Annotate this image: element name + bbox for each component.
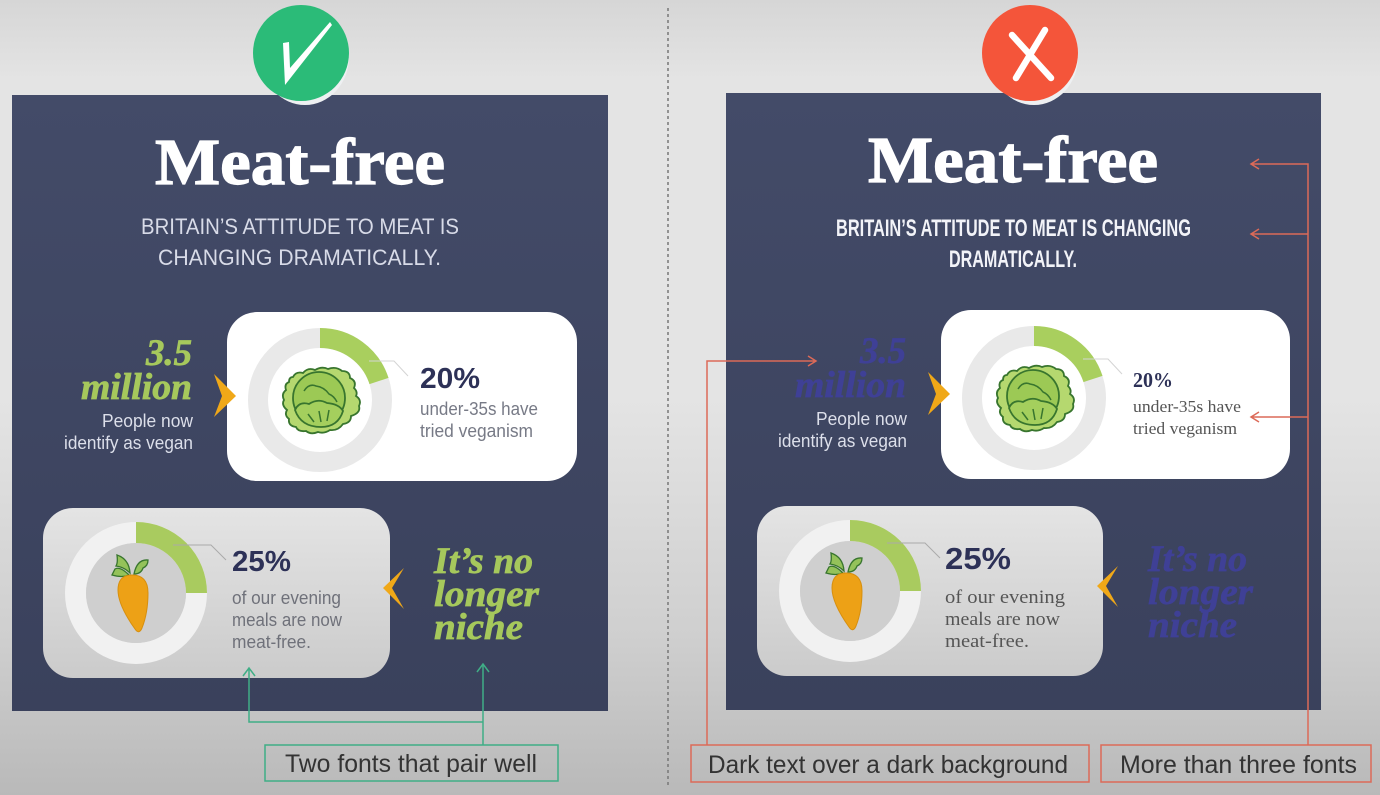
- subtitle: DRAMATICALLY.: [949, 246, 1077, 273]
- dotted centre divider: [667, 8, 669, 786]
- quote: it's no longer niche: longer: [434, 574, 540, 615]
- quote: it's no longer niche: longer: [1148, 572, 1254, 613]
- callout: more than three fonts: More than three fonts: [1120, 751, 1357, 779]
- subtitle: [141, 214, 459, 270]
- icon: green check mark: [253, 5, 349, 105]
- quote: it's no longer niche: [1147, 539, 1254, 646]
- chevron arrow right: [214, 374, 236, 417]
- callout: two fonts: Two fonts that pair well: [285, 750, 537, 778]
- card: 25 percent: meat-free.: [232, 632, 311, 652]
- stat: 3.5 million vegans: 3.5: [859, 331, 906, 372]
- card: 25 percent: meals are now: [232, 610, 343, 630]
- card: 20 percent: [227, 312, 577, 481]
- annotation arrows: good fonts: [243, 664, 489, 745]
- donut chart 20 percent: [972, 336, 1122, 460]
- card: 25 percent: meals are now: [945, 609, 1060, 630]
- stat: 3.5 million vegans: identify as vegan: [64, 433, 193, 453]
- stat: 3.5 million vegans: identify as vegan: [778, 431, 907, 451]
- card: 25 percent: of our evening: [232, 588, 341, 608]
- stat: 3.5 million vegans: 3.5: [145, 333, 192, 374]
- card: 25 percent: of our evening: [945, 587, 1066, 608]
- stat: 3.5 million vegans: People now: [816, 409, 908, 429]
- quote: it's no longer niche: It’s no: [1147, 539, 1247, 580]
- title: Meat-free: [155, 126, 445, 199]
- donut chart 25 percent: [76, 532, 226, 654]
- callout: two fonts: [265, 745, 558, 781]
- title: Meat-free: [868, 124, 1158, 197]
- subtitle: CHANGING DRAMATICALLY.: [158, 245, 441, 270]
- stat: 3.5 million vegans: [778, 331, 908, 451]
- subtitle: [836, 215, 1191, 273]
- chevron arrow right: [928, 372, 950, 415]
- quote: it's no longer niche: niche: [434, 607, 523, 648]
- quote: it's no longer niche: It’s no: [433, 541, 533, 582]
- card: 20 percent: under-35s have: [1133, 397, 1241, 416]
- card: 25 percent: meat-free.: [945, 631, 1029, 652]
- quote: it's no longer niche: [433, 541, 540, 648]
- donut chart 25 percent: [790, 530, 940, 652]
- stat text: 20%: [1133, 368, 1173, 392]
- subtitle: BRITAIN’S ATTITUDE TO MEAT IS: [141, 214, 459, 239]
- panel: bad example: [726, 93, 1321, 710]
- icon: carrot: [826, 553, 862, 630]
- card: 20 percent: [941, 310, 1290, 479]
- icon: red cross: [982, 5, 1078, 105]
- stat: 3.5 million vegans: million: [795, 365, 906, 406]
- quote: it's no longer niche: niche: [1148, 605, 1237, 646]
- stat: 3.5 million vegans: [64, 333, 194, 453]
- stat text: 25%: [232, 546, 291, 578]
- panel: good example: [12, 95, 608, 711]
- donut chart 20 percent: [258, 338, 408, 462]
- card: 20 percent: under-35s have: [420, 399, 538, 419]
- stat: 3.5 million vegans: million: [81, 367, 192, 408]
- card: 20 percent: tried veganism: [1133, 419, 1237, 438]
- stat text: 20%: [420, 363, 480, 395]
- icon: lettuce: [283, 368, 360, 433]
- chevron arrow left: [383, 568, 404, 609]
- annotation arrow: dark text: [707, 356, 816, 745]
- card: 25 percent: [43, 508, 390, 678]
- subtitle: BRITAIN’S ATTITUDE TO MEAT IS CHANGING: [836, 215, 1191, 242]
- annotation arrows: too many fonts: [1251, 159, 1308, 745]
- card: 20 percent: tried veganism: [420, 421, 533, 441]
- stat text: 25%: [945, 541, 1011, 576]
- card: 25 percent: [757, 506, 1103, 676]
- chevron arrow left: [1097, 566, 1118, 607]
- callout: dark text: Dark text over a dark background: [708, 751, 1068, 779]
- callout: more than three fonts: [1101, 745, 1371, 782]
- stat: 3.5 million vegans: People now: [102, 411, 194, 431]
- icon: lettuce: [997, 366, 1074, 431]
- icon: carrot: [112, 555, 148, 632]
